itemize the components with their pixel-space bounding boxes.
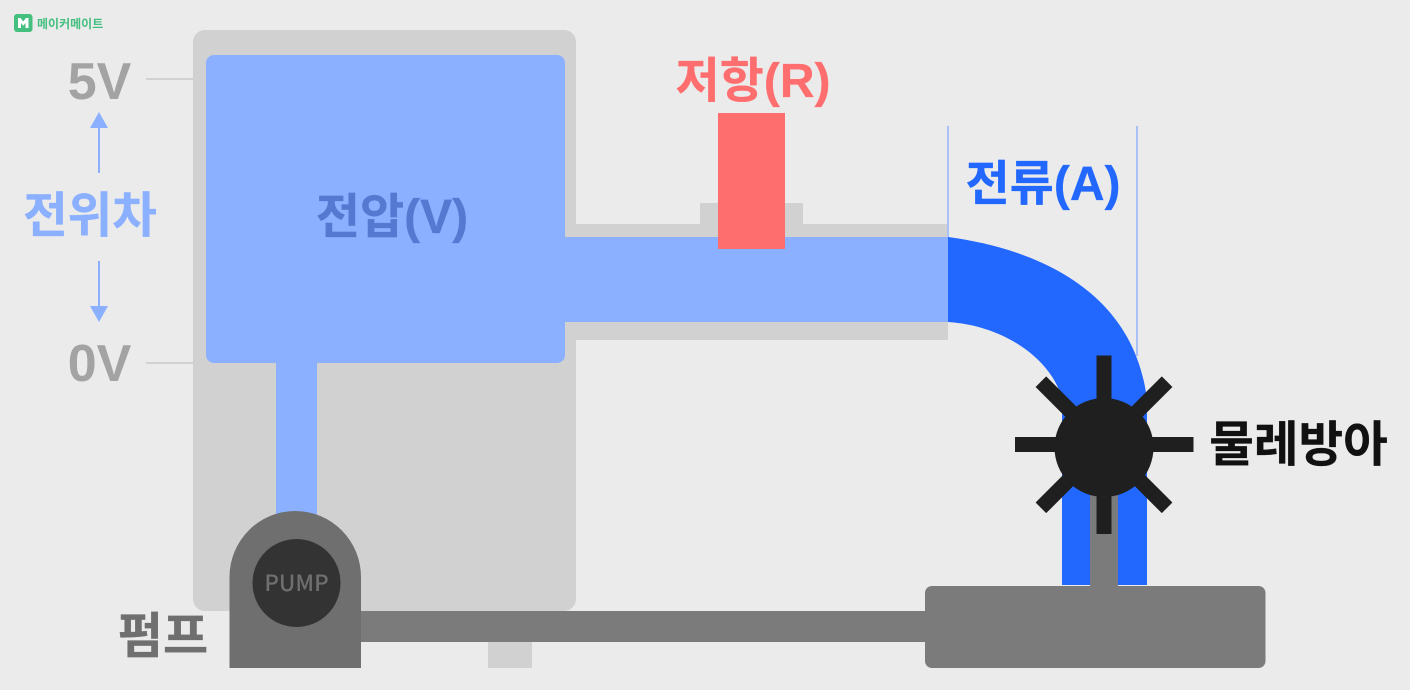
label: resistance: 저항(R) bbox=[676, 55, 830, 108]
pump: PUMP bbox=[264, 566, 329, 598]
label: current: 전류(A) bbox=[966, 158, 1120, 211]
water wheel bbox=[1015, 356, 1194, 534]
generator base bbox=[925, 586, 1266, 668]
logo: maker mate bbox=[14, 14, 103, 32]
5V level line bbox=[146, 78, 193, 80]
small support foot bbox=[488, 642, 532, 668]
label: pump: 펌프 bbox=[118, 610, 208, 664]
current width guide lines bbox=[947, 126, 1138, 356]
current flow curve bbox=[948, 237, 1147, 585]
arrow up bbox=[90, 112, 108, 173]
wheel shaft bbox=[1090, 490, 1118, 590]
arrow down bbox=[90, 261, 108, 322]
label: 5V: 5V bbox=[68, 53, 132, 111]
label: 0V: 0V bbox=[68, 335, 132, 393]
resistor block bbox=[718, 113, 785, 249]
water in tank and pipe bbox=[206, 55, 948, 525]
0V level line bbox=[146, 362, 193, 364]
label: potential difference: 전위차 bbox=[23, 189, 157, 243]
resistor mount bbox=[700, 203, 803, 225]
label: voltage: 전압(V) bbox=[316, 191, 468, 244]
horizontal pipe casing bbox=[565, 224, 948, 340]
label: water wheel: 물레방아 bbox=[1209, 418, 1388, 472]
base bar bbox=[355, 611, 930, 642]
logo: maker mate: 메이커메이트 bbox=[37, 16, 103, 31]
pump bbox=[230, 511, 361, 668]
tank body bbox=[193, 30, 576, 611]
